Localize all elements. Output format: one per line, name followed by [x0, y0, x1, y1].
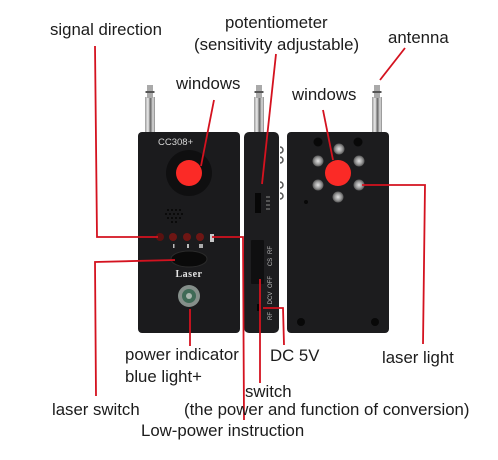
label: potentiometer: potentiometer [225, 13, 328, 32]
icon: back antenna [372, 85, 382, 133]
panel: back of device [287, 85, 389, 333]
label: antenna: antenna [388, 28, 449, 47]
callout lines [95, 46, 425, 420]
label: signal direction: signal direction [50, 20, 162, 39]
label: laser switch: laser switch [52, 400, 140, 419]
label: back windows: windows [291, 85, 356, 104]
icon: power indicator lens [178, 285, 200, 307]
front body [138, 132, 240, 333]
switch markings: CS [268, 258, 274, 266]
switch markings: OFF [268, 276, 274, 288]
signal direction lights [156, 233, 214, 248]
potentiometer wheel [255, 193, 270, 213]
switch markings: DCV [268, 292, 274, 304]
screw holes [297, 138, 379, 326]
function switch [251, 240, 264, 284]
label: power and function conversion: (the power and function of conversion) [184, 400, 469, 419]
icon: side antenna [254, 85, 264, 133]
icon: front antenna [145, 85, 155, 133]
laser button [171, 251, 207, 267]
label: DC 5V: DC 5V [270, 346, 320, 365]
label: laser light: laser light [382, 348, 454, 367]
switch markings: RF [268, 312, 274, 320]
label: low-power instruction: Low-power instruction [141, 421, 304, 440]
label: front windows: windows [175, 74, 240, 93]
switch markings: RF [268, 246, 274, 254]
switch markings [268, 246, 274, 320]
label: blue light: blue light+ [125, 367, 202, 386]
side clips [280, 147, 283, 199]
side body [244, 132, 279, 333]
DC port [257, 304, 261, 311]
panel: side of device [244, 85, 283, 333]
icon: laser LEDs [312, 144, 364, 202]
icon: front red window [166, 150, 212, 196]
laser label: Laser [176, 269, 203, 280]
icon: back red window [325, 160, 351, 186]
panel: front of device [138, 85, 240, 333]
label: sensitivity adjustable: (sensitivity adjustable) [194, 35, 359, 54]
label: switch: switch [245, 382, 292, 401]
model label: CC308+ [158, 137, 194, 148]
icon: speaker holes [165, 209, 183, 223]
label: power indicator: power indicator [125, 345, 239, 364]
back body [287, 132, 389, 333]
